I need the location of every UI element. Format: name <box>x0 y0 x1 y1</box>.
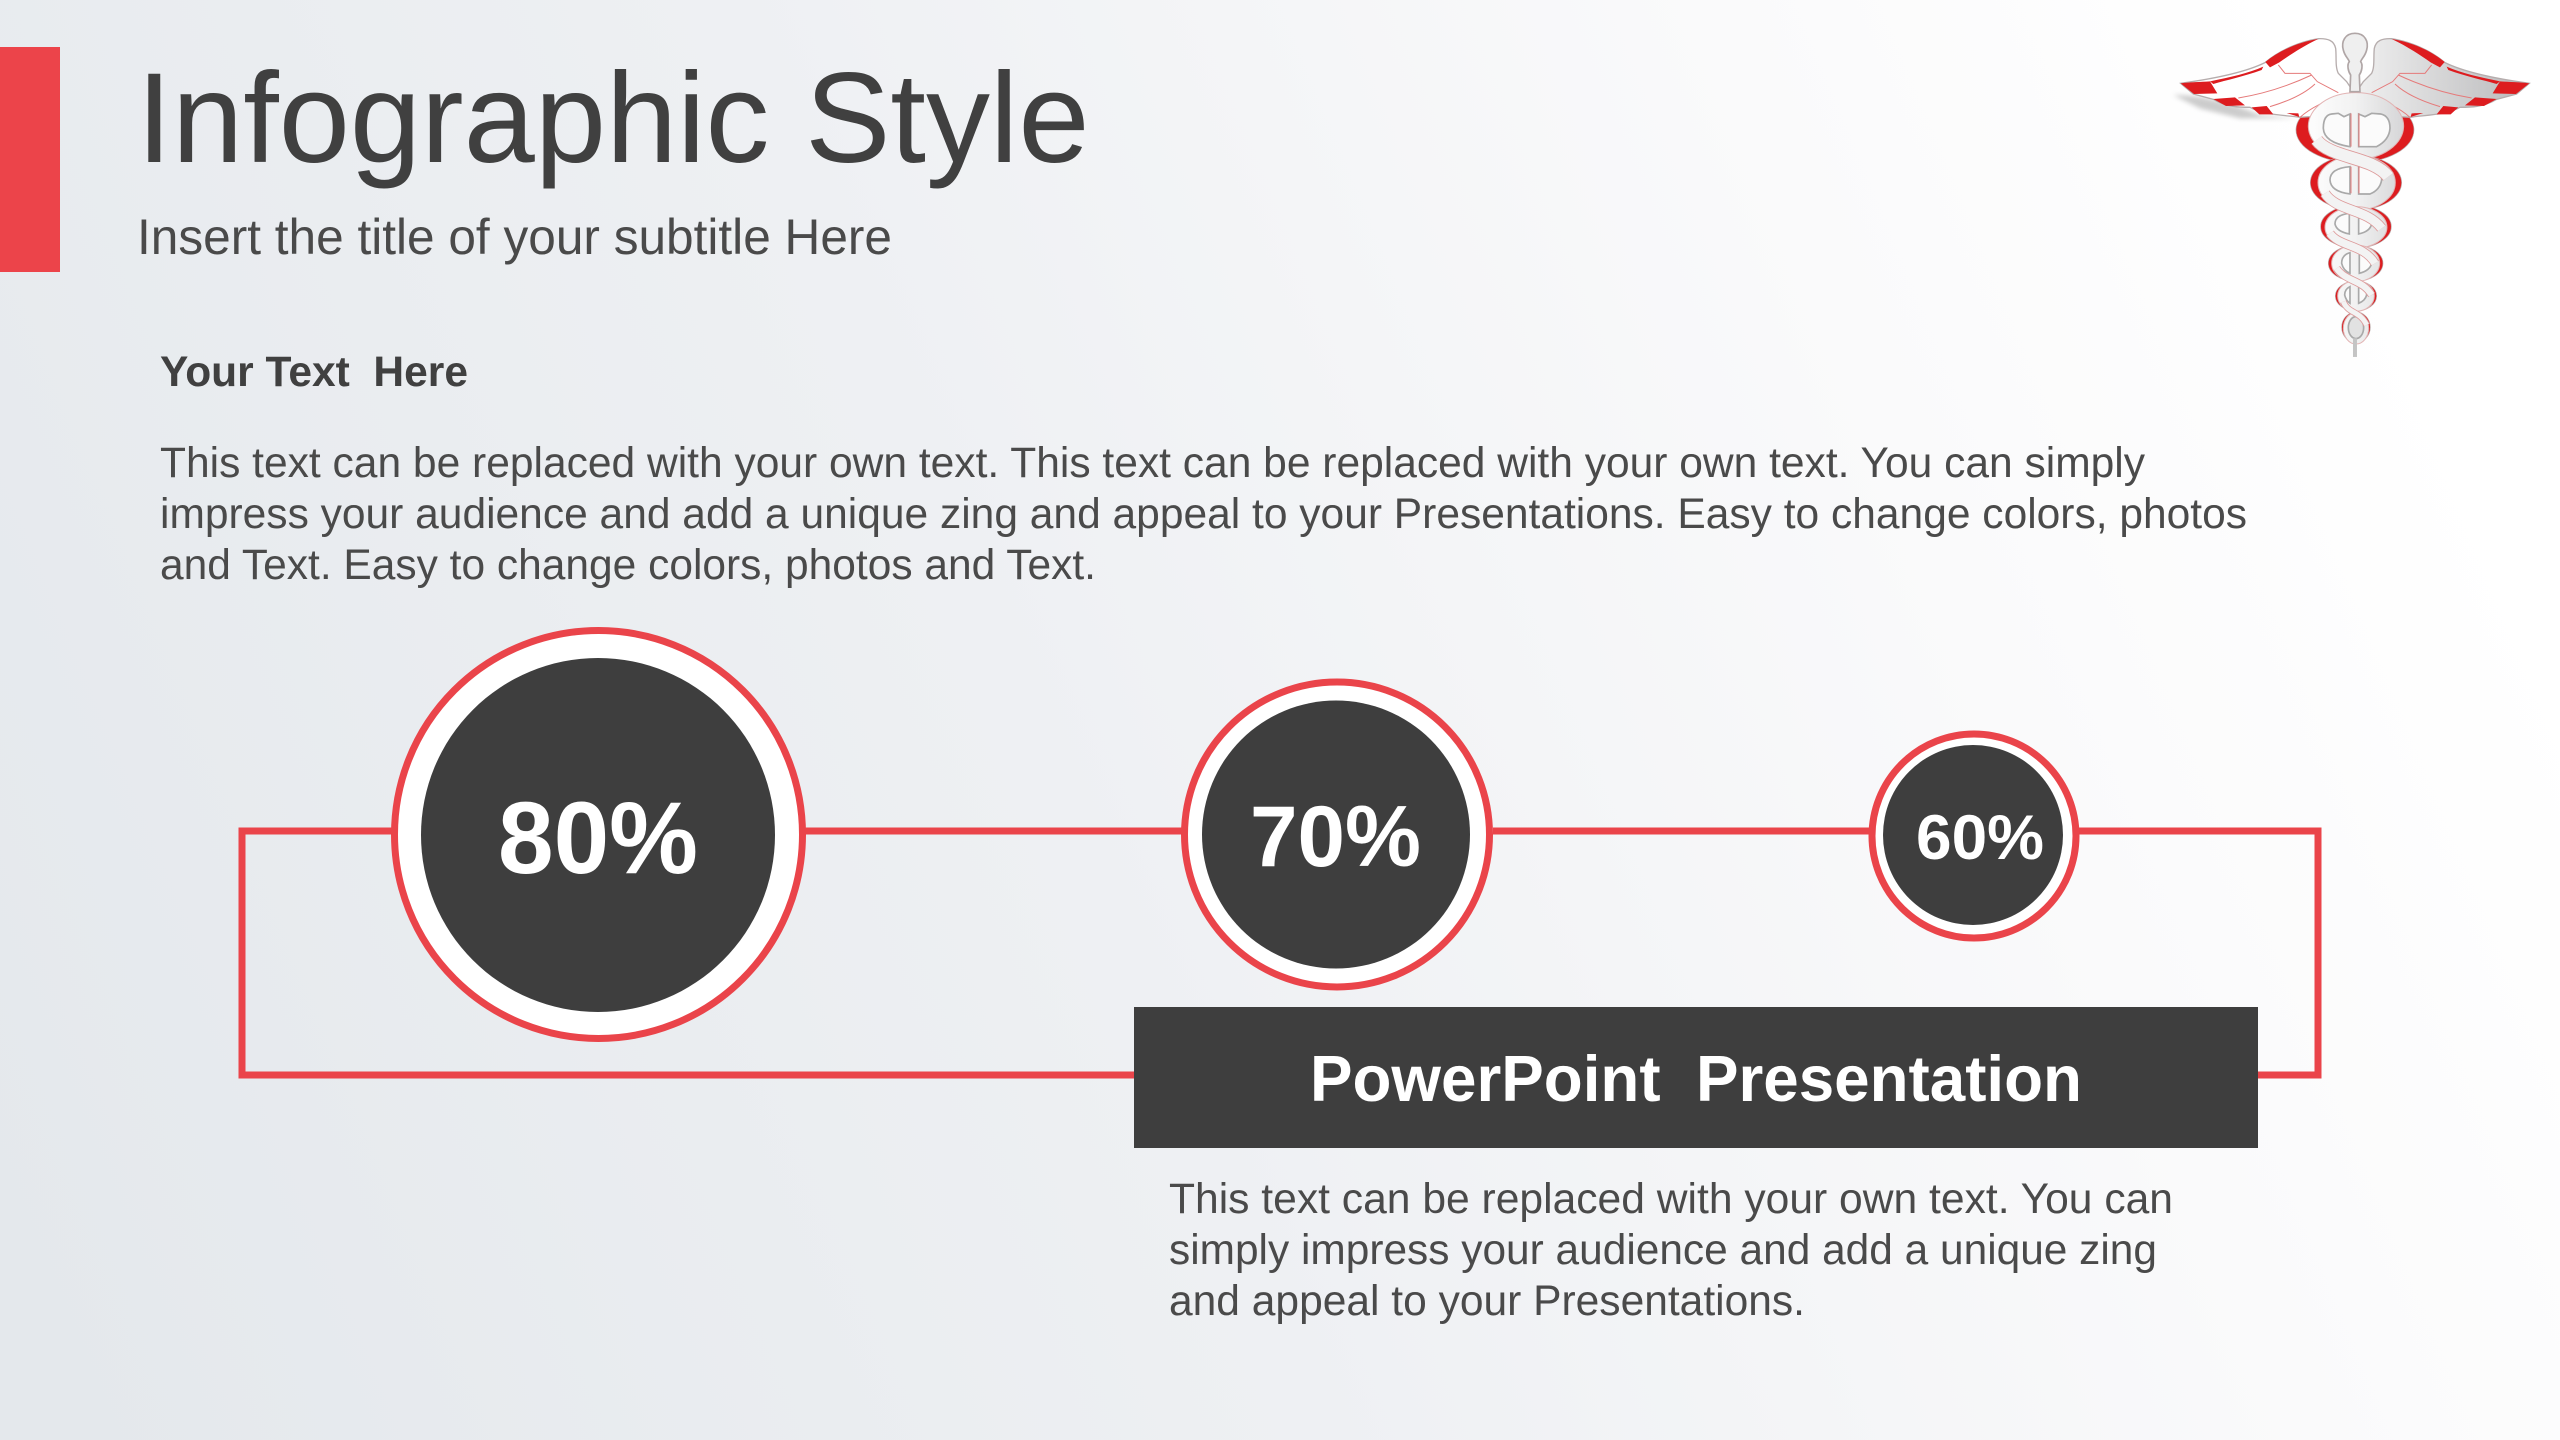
body paragraph <box>160 439 2247 589</box>
body paragraph: and Text. Easy to change colors, photos and Text. <box>160 541 1096 589</box>
serpents <box>2308 93 2404 344</box>
text block: banner description: and appeal to your Presentations. <box>1169 1277 1805 1325</box>
staff and head <box>2343 33 2367 357</box>
text block: banner description <box>1169 1175 2173 1325</box>
body paragraph: impress your audience and add a unique zing and appeal to your Presentations. Easy to change colors, photos <box>160 490 2247 538</box>
text heading: Your Text Here <box>160 348 468 396</box>
circle: 80%: 80% <box>498 781 698 895</box>
icon: caduceus <box>2173 33 2529 357</box>
body paragraph: This text can be replaced with your own text. This text can be replaced with your own text. You can simply <box>160 439 2145 487</box>
connector lines <box>242 831 2318 1075</box>
title: Infographic Style <box>136 47 1090 190</box>
text block: banner description: simply impress your audience and add a unique zing <box>1169 1226 2157 1274</box>
circle: 60%: 60% <box>1916 803 2044 873</box>
banner: PowerPoint Presentation: PowerPoint Presentation <box>1310 1042 2082 1115</box>
text block: your text here <box>160 348 2247 589</box>
red accent bar <box>0 47 60 272</box>
right wing <box>2357 39 2529 117</box>
serpent red edges <box>2296 97 2414 343</box>
circle: 60% <box>1872 734 2076 938</box>
banner: PowerPoint Presentation <box>1134 1007 2258 1148</box>
circle: 70% <box>1184 682 1490 987</box>
left wing <box>2181 39 2353 117</box>
circle: 70%: 70% <box>1250 789 1421 885</box>
circle: 80% <box>394 630 802 1038</box>
text block: banner description: This text can be replaced with your own text. You can <box>1169 1175 2173 1223</box>
subtitle: Insert the title of your subtitle Here <box>137 209 892 265</box>
